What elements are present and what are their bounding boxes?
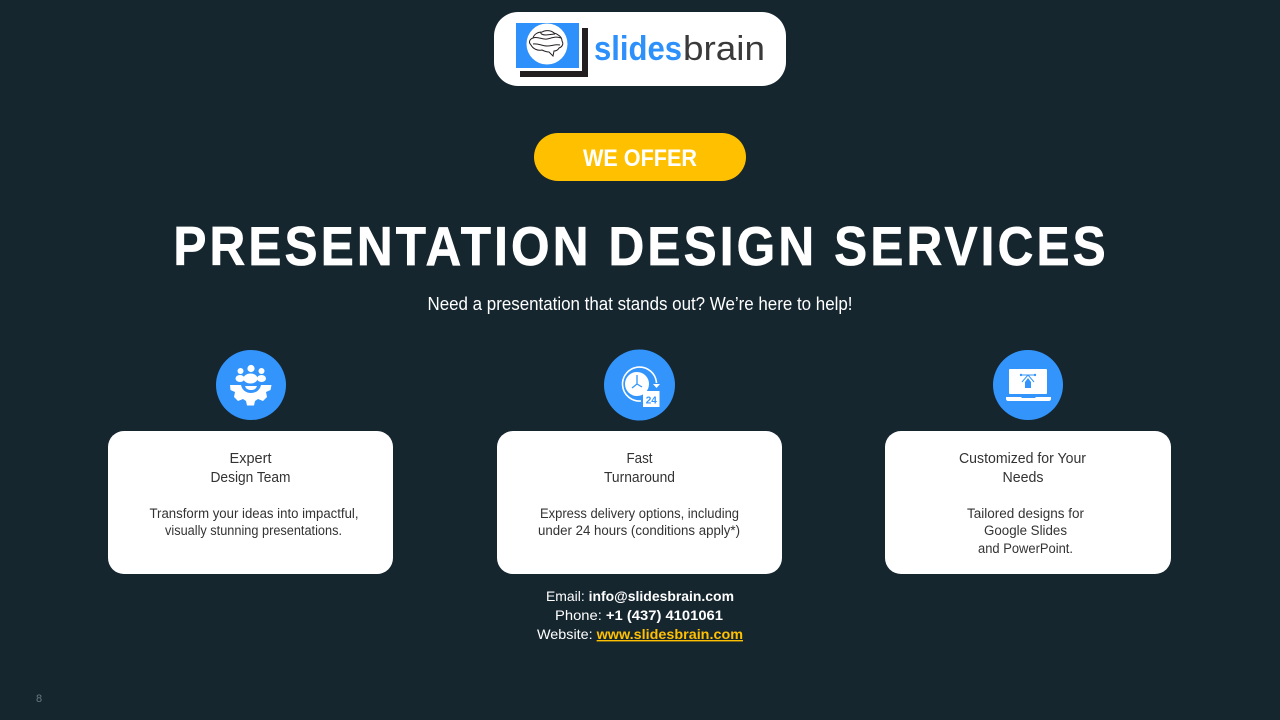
icon: laptop design	[993, 350, 1063, 420]
badge: we offer: WE OFFER	[583, 145, 697, 172]
card heading: Customized for Your	[959, 451, 1086, 467]
badge: we offer	[534, 133, 746, 181]
card heading	[959, 451, 1086, 486]
card body: Tailored designs for	[967, 506, 1084, 521]
icon: team gear	[216, 350, 286, 420]
card body: Express delivery options, including	[540, 506, 739, 521]
card heading: Fast	[626, 451, 652, 467]
card heading: Turnaround	[604, 470, 675, 486]
card heading: Design Team	[210, 470, 290, 486]
contact details: Phone: +1 (437) 4101061	[555, 607, 723, 623]
subtitle: Need a presentation that stands out? We’re here to help!	[428, 294, 852, 314]
icon: 24 hour clock: 24	[646, 396, 657, 406]
icon: 24 hour clock	[604, 350, 675, 420]
card body: and PowerPoint.	[978, 541, 1073, 556]
card body: under 24 hours (conditions apply*)	[538, 523, 740, 538]
title: PRESENTATION DESIGN SERVICES	[173, 217, 1106, 278]
contact details	[537, 588, 743, 642]
card body	[538, 506, 740, 538]
icon: logo square with brain	[516, 23, 588, 77]
card: customized	[885, 431, 1171, 574]
page number: 8	[36, 693, 42, 705]
card heading	[604, 451, 675, 486]
card: fast turnaround	[497, 431, 782, 574]
logo: slidesbrain	[494, 12, 786, 86]
contact details: Website: www.slidesbrain.com	[537, 626, 743, 642]
contact details: Email: info@slidesbrain.com	[546, 588, 734, 604]
card body: Google Slides	[984, 523, 1067, 538]
card heading: Needs	[1002, 470, 1044, 486]
card heading	[210, 451, 290, 486]
card heading: Expert	[230, 451, 272, 467]
logo wordmark: brain	[683, 30, 765, 68]
card body	[150, 506, 358, 538]
card body	[967, 506, 1084, 556]
card: expert design team	[108, 431, 393, 574]
card body: Transform your ideas into impactful,	[150, 506, 358, 521]
logo wordmark: slides	[594, 30, 682, 68]
logo wordmark	[594, 30, 765, 68]
card body: visually stunning presentations.	[165, 523, 342, 538]
